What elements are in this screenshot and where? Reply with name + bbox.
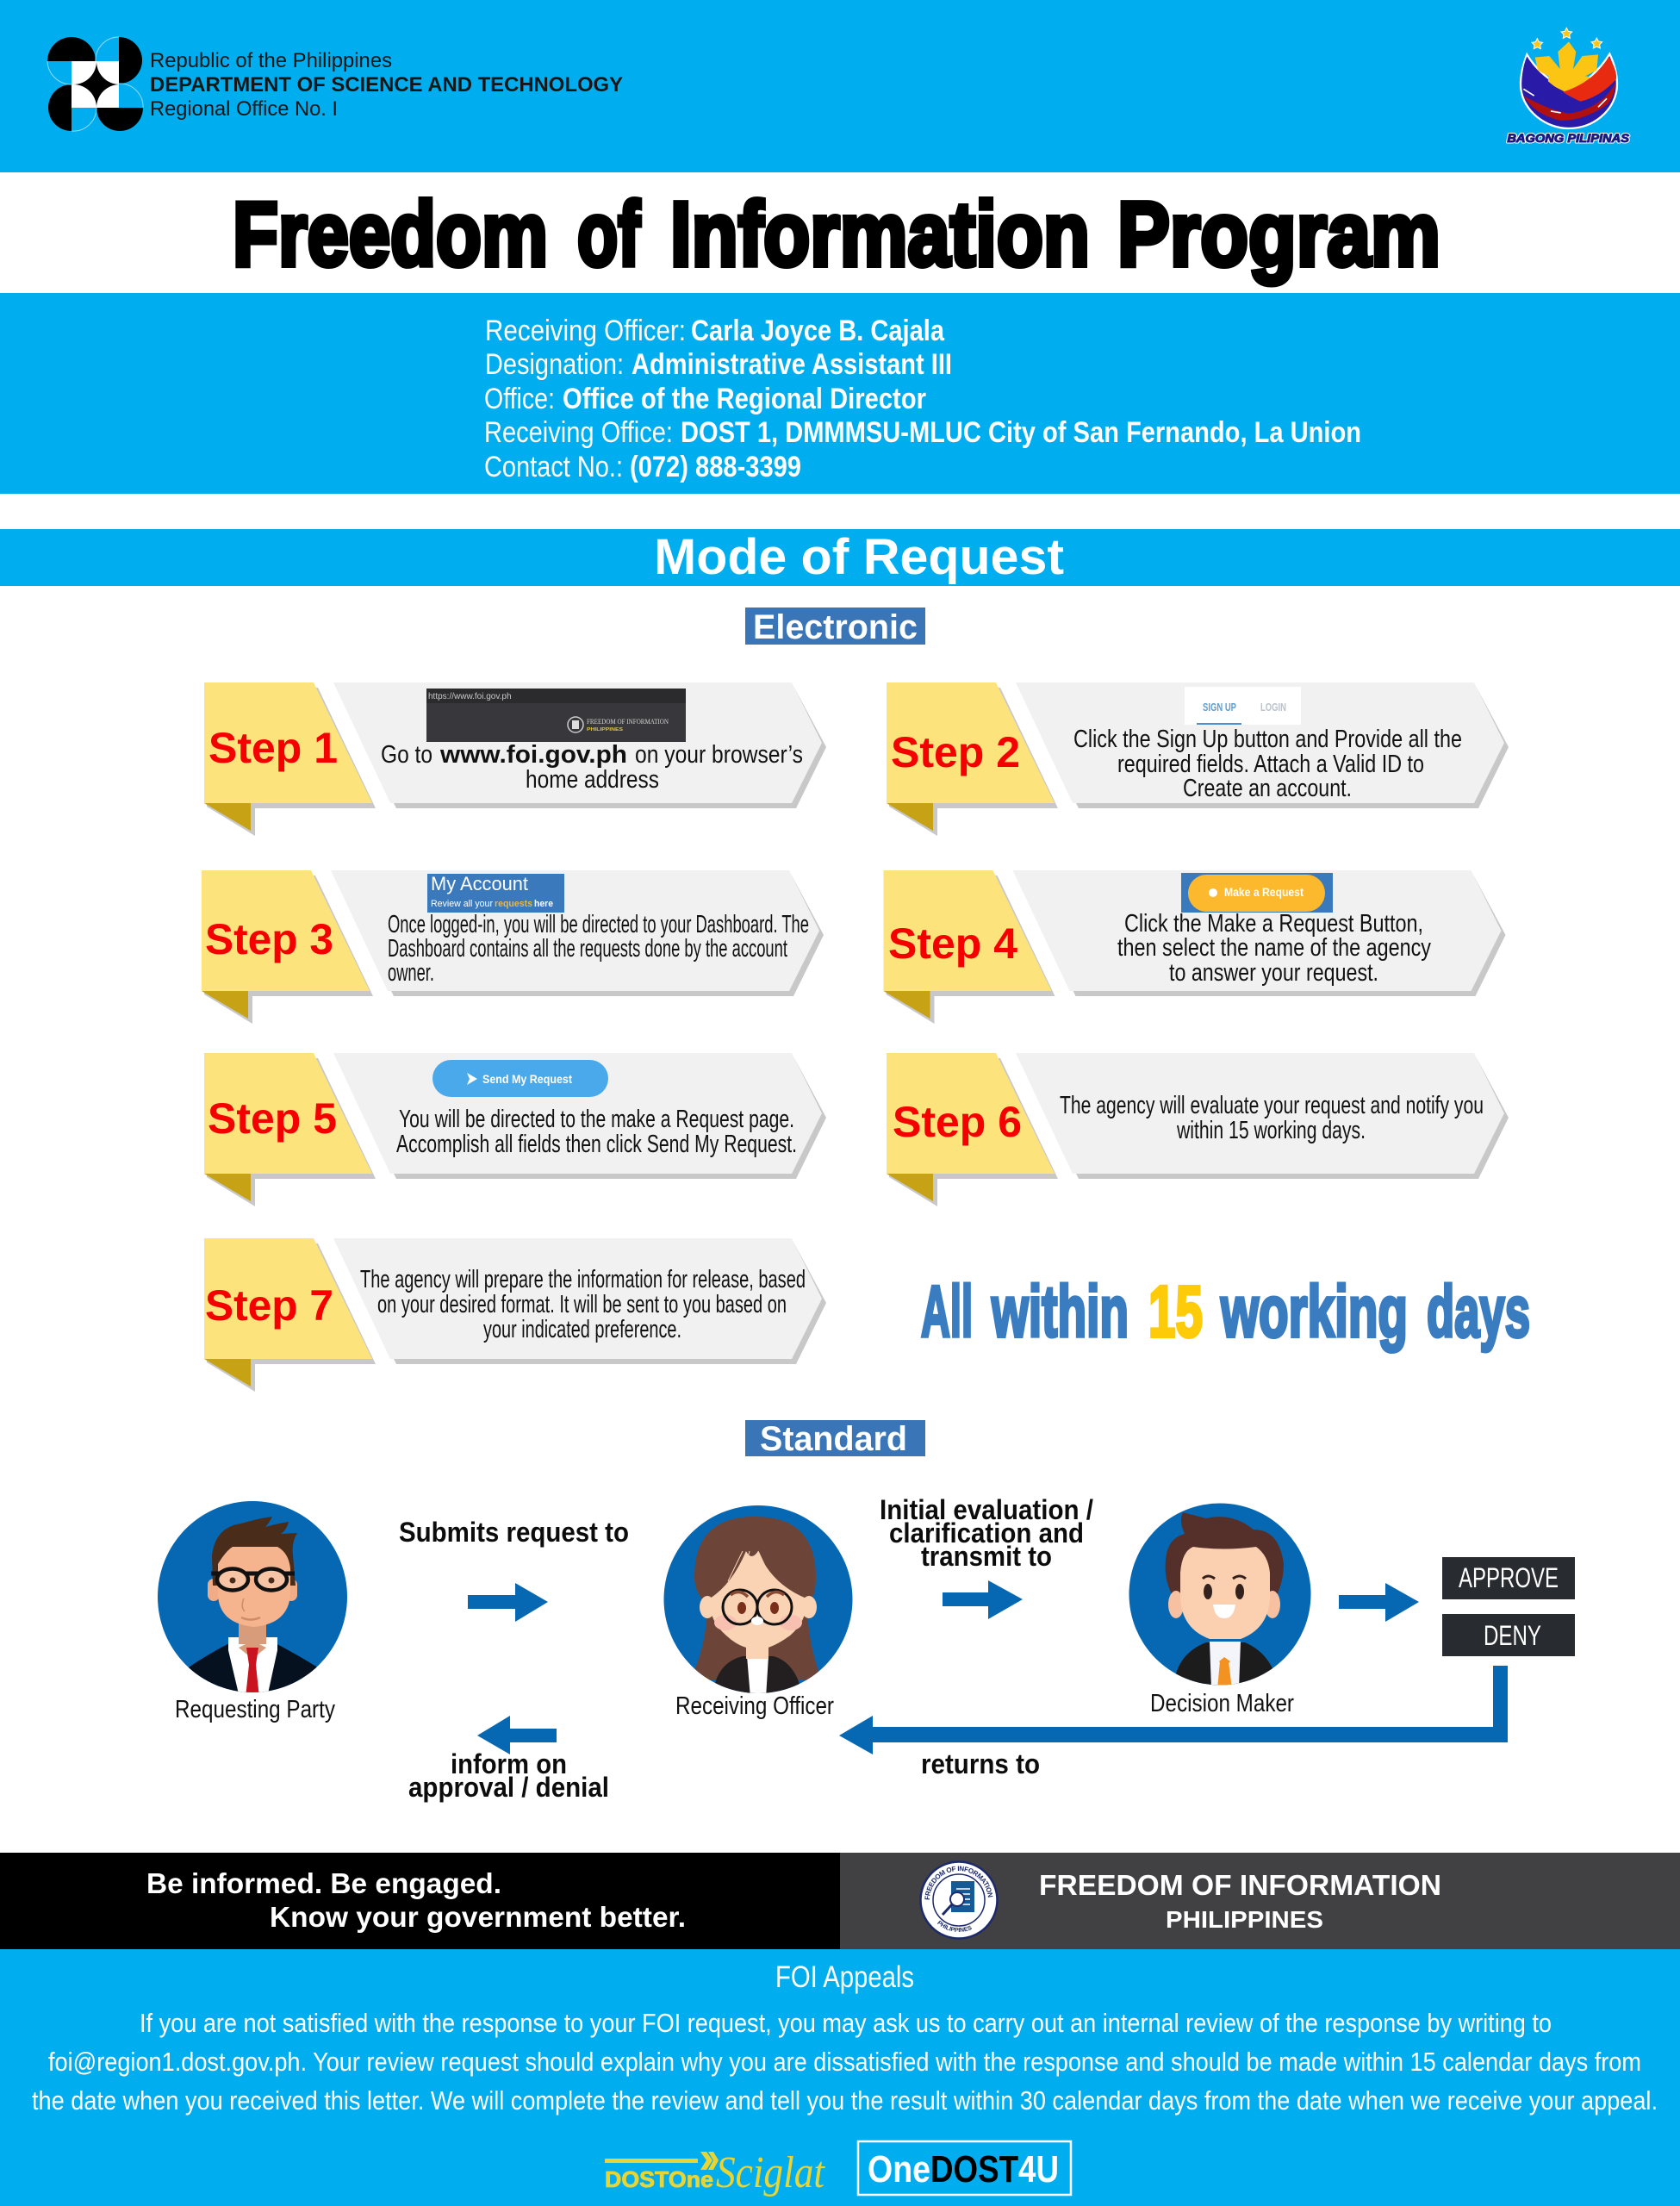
screenshot: send my request button: Send My Request	[482, 1072, 572, 1086]
screenshot: sign up tab: SIGN UP	[1203, 701, 1236, 714]
label: initial evaluation: transmit to	[921, 1541, 1052, 1572]
screenshot: sign up tab	[1185, 687, 1301, 725]
screenshot: my account: My Account	[431, 873, 528, 894]
panel: step 3: Step 3	[205, 915, 333, 963]
panel: receiving officer details: Administrative Assistant III	[632, 348, 952, 381]
arrow: to decision maker	[943, 1580, 1023, 1619]
approve box: APPROVE	[1459, 1562, 1559, 1593]
callout: all within 15 working days: 15	[1148, 1271, 1203, 1352]
screenshot: my account: requests	[495, 899, 532, 909]
label: initial evaluation: Initial evaluation /	[880, 1494, 1093, 1525]
header band	[0, 0, 1680, 172]
label: submits request to: Submits request to	[399, 1517, 629, 1548]
title: Program	[1117, 184, 1440, 285]
panel: step 1: Step 1	[208, 724, 338, 772]
logo: OneDOST4U	[858, 2141, 1071, 2195]
panel: step 3: Dashboard contains all the requests done by the account	[388, 935, 787, 963]
panel: receiving officer details: Office of the Regional Director	[563, 383, 926, 415]
icon: Bagong Pilipinas logo: BAGONG PILIPINAS	[1507, 132, 1629, 145]
label: inform on approval or denial	[408, 1748, 609, 1803]
panel: step 3: owner.	[388, 959, 434, 987]
screenshot: my account: Review all your	[431, 899, 493, 909]
icon: Bagong Pilipinas logo: BAGONG PILIPINAS	[1507, 132, 1629, 145]
arrow: to approve or deny	[1339, 1583, 1419, 1622]
label: initial evaluation: clarification and	[889, 1517, 1084, 1549]
icon: Bagong Pilipinas logo	[1507, 28, 1629, 145]
callout: all within 15 working days: days	[1427, 1271, 1530, 1352]
arrow: to receiving officer	[468, 1583, 548, 1622]
screenshot: browser address bar	[426, 689, 686, 742]
panel: step 3	[202, 870, 824, 1024]
heading: Electronic: Electronic	[753, 608, 918, 646]
label: returns to: returns to	[921, 1748, 1040, 1779]
callout: all within 15 working days	[921, 1271, 1530, 1352]
logo: OneDOST4U: 4U	[1018, 2148, 1059, 2190]
panel: step 4: to answer your request.	[1169, 959, 1378, 987]
panel: step 7: on your desired format. It will be sent to you based on	[377, 1291, 787, 1318]
panel: step 4: then select the name of the agency	[1117, 934, 1431, 962]
panel: step 3: Once logged-in, you will be directed to your Dashboard. The	[388, 911, 809, 938]
panel: step 6	[887, 1053, 1509, 1206]
panel: FOI Philippines band	[840, 1853, 1680, 1949]
icon: decision maker avatar	[1129, 1503, 1311, 1689]
callout: all within 15 working days: working	[1220, 1271, 1408, 1352]
arrow: returns to receiving officer	[839, 1666, 1508, 1754]
deny box: DENY	[1484, 1620, 1541, 1651]
panel: step 2: Create an account.	[1183, 775, 1352, 802]
logo: DOSTOne Sciglat	[605, 2148, 825, 2197]
logo: OneDOST4U: One	[868, 2148, 930, 2190]
heading: Mode of Request: Mode of Request	[654, 529, 1064, 585]
panel: slogan band: Be informed. Be engaged.	[146, 1867, 501, 1899]
logo: DOSTOne Sciglat: DOSTOne	[605, 2166, 713, 2192]
title: Information	[670, 184, 1090, 285]
panel: step 1: www.foi.gov.ph	[439, 741, 627, 769]
panel: receiving officer details: Receiving Office:	[484, 416, 673, 449]
panel: step 7: your indicated preference.	[483, 1316, 681, 1343]
panel: step 6: The agency will evaluate your request and notify you	[1060, 1092, 1484, 1119]
appeals paragraph	[32, 2008, 1658, 2116]
screenshot: browser address bar: FREEDOM OF INFORMATION	[587, 717, 669, 726]
screenshot: my account: here	[534, 899, 553, 909]
screenshot: send my request button	[432, 1060, 608, 1097]
panel: FOI Philippines band: FREEDOM OF INFORMATION	[1039, 1869, 1441, 1901]
title	[233, 184, 1440, 285]
approve box	[1442, 1557, 1575, 1599]
screenshot: browser address bar: PHILIPPINES	[587, 727, 623, 732]
panel: step 1: Go to	[381, 741, 432, 769]
icon: FOI seal	[919, 1860, 999, 1940]
panel: step 1: on your browser’s	[635, 741, 803, 769]
screenshot: make a request button: Make a Request	[1224, 885, 1304, 899]
arrow: inform requesting party	[477, 1716, 557, 1754]
logo: OneDOST4U: DOST	[930, 2148, 1018, 2190]
panel: step 4: Step 4	[888, 919, 1017, 968]
heading: Standard: Standard	[760, 1420, 907, 1458]
icon: requesting party avatar	[158, 1501, 347, 1698]
callout: all within 15 working days: within	[991, 1271, 1129, 1352]
panel: step 7: Step 7	[205, 1281, 333, 1330]
panel: step 4: Click the Make a Request Button,	[1124, 910, 1423, 938]
callout: all within 15 working days: All	[921, 1271, 973, 1352]
heading: Mode of Request	[0, 529, 1680, 586]
icon: FOI seal: PHILIPPINES	[937, 1920, 972, 1932]
deny box	[1442, 1614, 1575, 1656]
panel: step 2: Step 2	[891, 728, 1020, 776]
title: of	[577, 184, 641, 285]
panel: slogan band: Know your government better.	[270, 1901, 686, 1933]
label: receiving officer: Receiving Officer	[675, 1692, 834, 1720]
panel: receiving officer details: Receiving Officer:	[485, 315, 686, 347]
panel: step 7	[204, 1238, 826, 1392]
panel: receiving officer details: (072) 888-3399	[630, 451, 801, 483]
panel: step 2: required fields. Attach a Valid ID to	[1117, 751, 1424, 778]
panel: step 1: home address	[526, 766, 659, 794]
organisation name: Regional Office No. I	[150, 97, 338, 121]
panel: step 5: You will be directed to the make a Request page.	[399, 1106, 794, 1133]
panel: receiving officer details: Office:	[484, 383, 555, 415]
panel: step 7: The agency will prepare the information for release, based	[360, 1266, 806, 1293]
icon: FOI seal: FREEDOM OF INFORMATION	[924, 1866, 992, 1899]
label: requesting party: Requesting Party	[175, 1696, 335, 1723]
label: initial evaluation	[880, 1494, 1093, 1572]
logo: DOSTOne Sciglat: Sciglat	[716, 2148, 825, 2197]
panel: receiving officer details: Contact No.:	[484, 451, 623, 483]
screenshot: browser address bar: https://www.foi.gov.ph	[428, 692, 512, 701]
label: inform on approval or denial: approval / denial	[408, 1772, 609, 1803]
title: Freedom	[233, 184, 548, 285]
panel: step 2	[887, 682, 1509, 836]
panel: receiving officer details	[0, 293, 1680, 494]
icon: receiving officer avatar	[663, 1505, 853, 1698]
panel: slogan band	[0, 1853, 840, 1949]
organisation name	[150, 49, 623, 121]
organisation name: Republic of the Philippines	[150, 49, 392, 72]
screenshot: sign up tab: LOGIN	[1260, 701, 1286, 714]
screenshot: make a request button	[1181, 873, 1333, 913]
panel: receiving officer details: Designation:	[485, 348, 624, 381]
icon: DOST logo	[47, 37, 143, 131]
label: inform on approval or denial: inform on	[451, 1748, 567, 1779]
panel: step 2: Click the Sign Up button and Provide all the	[1073, 726, 1462, 753]
screenshot: my account	[427, 873, 564, 913]
panel: receiving officer details: Carla Joyce B. Cajala	[691, 315, 945, 347]
panel: FOI Philippines band: PHILIPPINES	[1166, 1906, 1323, 1933]
panel: step 5	[204, 1053, 826, 1206]
panel: receiving officer details: DOST 1, DMMMSU-MLUC City of San Fernando, La Union	[681, 416, 1361, 449]
label: decision maker: Decision Maker	[1150, 1690, 1294, 1717]
panel: FOI appeals	[0, 1949, 1680, 2206]
panel: step 5: Step 5	[208, 1094, 337, 1143]
organisation name: DEPARTMENT OF SCIENCE AND TECHNOLOGY	[150, 73, 623, 97]
heading: FOI Appeals: FOI Appeals	[775, 1960, 914, 1994]
panel: step 1	[204, 682, 826, 836]
panel: step 6: Step 6	[893, 1098, 1022, 1146]
panel: step 4	[884, 870, 1506, 1024]
panel: step 6: within 15 working days.	[1176, 1117, 1366, 1144]
panel: step 5: Accomplish all fields then click Send My Request.	[396, 1131, 797, 1158]
